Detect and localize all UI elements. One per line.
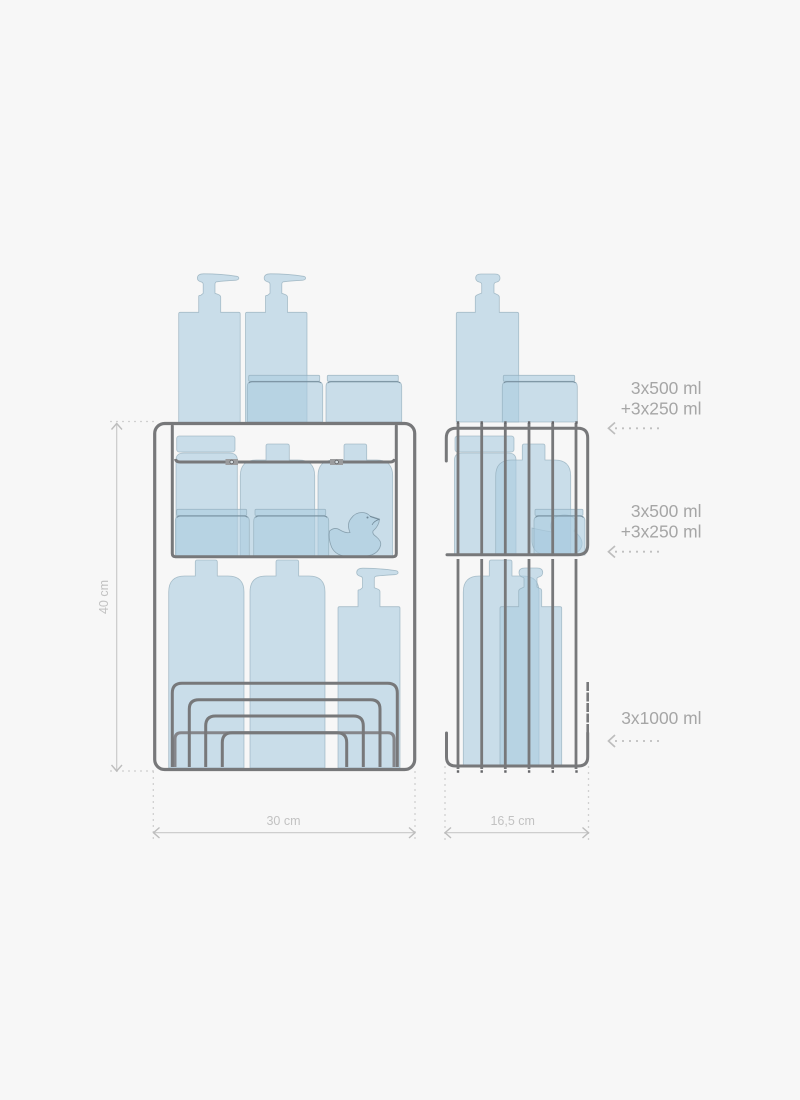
front middle row: bottle 2 [240,444,315,556]
dimension: 30 cm width [153,771,415,842]
side middle row: jar [534,509,585,555]
capacity label: middle: 3x500 ml [631,501,702,521]
icon: rubber duck [329,512,381,556]
side middle row: wide-lid bottle [454,436,516,555]
label: 16,5 cm: 16,5 cm [490,814,535,828]
panel: front view [155,274,415,770]
front middle row: wide-lid bottle [176,436,237,556]
side top row: jar [502,375,577,422]
dimension: 40 cm height [97,422,155,771]
side bottom row: pump bottle [500,568,562,766]
front top row: pump bottle 1 [179,274,240,422]
capacity label: upper: 3x500 ml [631,378,702,398]
capacity label: middle: +3x250 ml [621,522,702,542]
side bottom row: large bottle [463,560,539,766]
capacity label: middle [621,501,702,542]
label: 30 cm: 30 cm [266,814,301,828]
side top row: pump bottle [456,274,519,422]
front lower jar 1 [175,509,249,556]
arrow: upper [608,422,660,434]
label: 40 cm: 40 cm [97,580,111,614]
front clip right [330,459,343,465]
arrow: bottom [608,735,660,747]
front bottom row: large bottle 1 [169,560,244,768]
front clip left [226,459,238,465]
side middle row: duck seen from the side [532,515,582,555]
front lower rack: wires [172,683,397,767]
front top row: jar 1 [247,375,323,422]
capacity label: upper: +3x250 ml [621,398,702,418]
front middle row: bottle 3 [318,444,393,556]
capacity label: bottom: 3x1000 ml [621,708,702,728]
side middle row: bottle [496,444,571,555]
panel: side view [446,274,588,772]
front top row: pump bottle 2 [246,274,307,422]
side upper frame wire [446,428,588,555]
front outer frame [155,424,415,770]
front bottom row: pump bottle [338,568,400,768]
dimension: 16,5 cm depth [445,766,588,842]
front bottom row: large bottle 2 [250,560,325,768]
front lower jar 2 [254,509,329,556]
arrow: middle [608,546,660,558]
capacity label: upper [621,378,702,418]
side view vertical bars [457,422,580,772]
front upper basket: wires [172,426,396,557]
side lower frame wire [446,682,588,766]
front top row: jar 2 [326,375,402,422]
